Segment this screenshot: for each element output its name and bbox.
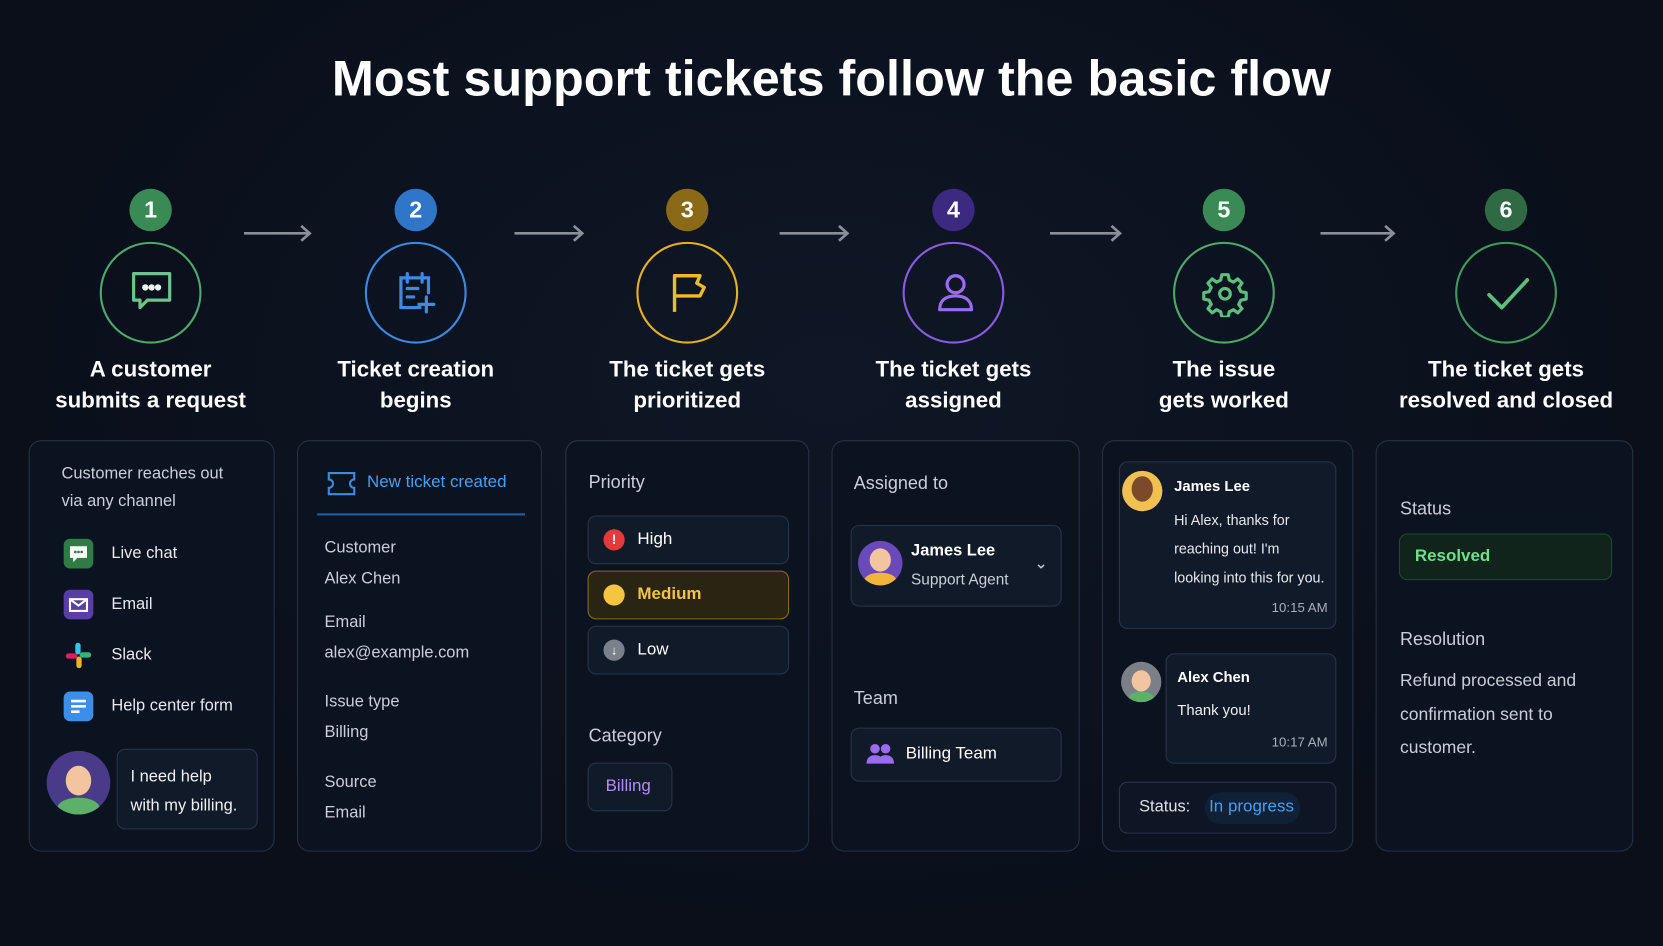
heading 6: resolved and closed bbox=[1399, 388, 1613, 413]
panel: ticket details: alex@example.com bbox=[325, 644, 469, 662]
heading 4: The ticket gets bbox=[875, 357, 1031, 382]
fields bbox=[324, 539, 400, 588]
panel: assignment bbox=[832, 440, 1080, 852]
badge 4 bbox=[932, 189, 975, 231]
icon: chat bbox=[100, 242, 202, 344]
badge 4: 4 bbox=[947, 196, 960, 223]
agent card bbox=[851, 525, 1062, 607]
message james: James Lee bbox=[1174, 477, 1250, 494]
option low: ↓ bbox=[611, 643, 617, 658]
panel: channels bbox=[29, 440, 275, 852]
billing tag: Billing bbox=[606, 777, 651, 795]
agent card: Support Agent bbox=[911, 572, 1009, 589]
status in progress: In progress bbox=[1209, 798, 1294, 816]
step 6 header bbox=[1399, 188, 1613, 413]
heading 1: submits a request bbox=[55, 388, 246, 413]
badge 3 bbox=[666, 189, 708, 231]
customer message bbox=[46, 748, 258, 830]
arrow 1 bbox=[244, 225, 312, 242]
heading 6: The ticket gets bbox=[1428, 357, 1584, 382]
message alex: Alex Chen bbox=[1177, 668, 1250, 685]
option high: High bbox=[637, 530, 672, 548]
agent card: James Lee bbox=[911, 542, 995, 560]
channel: live chat bbox=[64, 538, 178, 568]
heading 2: begins bbox=[380, 388, 452, 413]
resolution text: Refund processed and bbox=[1400, 671, 1576, 690]
status in progress bbox=[1119, 782, 1336, 834]
step 3 header bbox=[609, 188, 765, 413]
arrow 2 bbox=[514, 225, 584, 242]
billing tag bbox=[588, 763, 672, 811]
priority label: Priority bbox=[589, 472, 645, 492]
panel: ticket details bbox=[297, 440, 542, 852]
step 2 header bbox=[337, 188, 494, 413]
panel: ticket details: Email bbox=[325, 804, 366, 822]
arrow 5 bbox=[1320, 225, 1396, 242]
panel: ticket details: Billing bbox=[325, 723, 368, 741]
heading 5 bbox=[1159, 357, 1289, 413]
heading 5: gets worked bbox=[1159, 388, 1289, 413]
panel: ticket details: Issue type bbox=[325, 693, 399, 711]
heading 3: The ticket gets bbox=[609, 357, 765, 382]
resolution text: customer. bbox=[1400, 738, 1476, 757]
message james: Hi Alex, thanks for bbox=[1174, 512, 1289, 528]
message james: reaching out! I'm bbox=[1174, 541, 1279, 557]
arrow 4 bbox=[1050, 225, 1122, 242]
status in progress: Status: bbox=[1139, 798, 1190, 816]
badge 2 bbox=[395, 189, 437, 231]
heading 1 bbox=[55, 357, 246, 413]
heading 2 bbox=[337, 357, 494, 413]
channel: help form bbox=[64, 692, 233, 722]
message james: looking into this for you. bbox=[1174, 570, 1325, 585]
channel: slack: Slack bbox=[111, 646, 152, 664]
option low: Low bbox=[637, 641, 669, 659]
panel: conversation bbox=[1102, 440, 1353, 852]
badge 3: 3 bbox=[681, 196, 694, 223]
heading 2: Ticket creation bbox=[337, 357, 494, 382]
heading 4: assigned bbox=[905, 388, 1002, 413]
icon: check bbox=[1455, 242, 1557, 344]
team card bbox=[851, 728, 1062, 782]
option low bbox=[588, 626, 789, 675]
option high: ! bbox=[612, 531, 616, 547]
heading 3 bbox=[609, 357, 765, 413]
step 1 header bbox=[55, 188, 246, 413]
fields: Alex Chen bbox=[325, 570, 400, 588]
badge 5: 5 bbox=[1217, 196, 1230, 223]
option medium bbox=[588, 571, 789, 619]
resolution label: Resolution bbox=[1400, 629, 1485, 649]
status label: Status bbox=[1400, 498, 1451, 519]
icon: flag bbox=[636, 242, 738, 344]
panel: priority bbox=[565, 440, 809, 852]
option high bbox=[588, 515, 789, 564]
option medium: Medium bbox=[637, 585, 702, 603]
customer message: with my billing. bbox=[130, 797, 237, 815]
message alex: Thank you! bbox=[1177, 701, 1251, 718]
message james: 10:15 AM bbox=[1272, 600, 1328, 615]
fields: Customer bbox=[325, 539, 396, 557]
panel: resolution bbox=[1376, 440, 1633, 852]
intro text: via any channel bbox=[62, 492, 176, 510]
customer message: I need help bbox=[130, 768, 212, 786]
resolved badge bbox=[1399, 533, 1612, 580]
agent card: ⌄ bbox=[1034, 555, 1048, 573]
resolution text bbox=[1400, 671, 1576, 757]
heading 5: The issue bbox=[1173, 357, 1275, 382]
badge 1: 1 bbox=[144, 196, 157, 223]
panel: ticket details: Source bbox=[325, 773, 377, 791]
channel: help form: Help center form bbox=[111, 697, 233, 715]
assigned label: Assigned to bbox=[854, 473, 948, 493]
message alex bbox=[1121, 653, 1336, 764]
badge 5 bbox=[1203, 189, 1245, 231]
heading 1: A customer bbox=[90, 357, 211, 382]
panel: ticket details: Email bbox=[325, 613, 366, 631]
intro text: Customer reaches out bbox=[62, 465, 223, 483]
new ticket header: New ticket created bbox=[367, 473, 507, 491]
message james bbox=[1119, 461, 1336, 629]
title: Most support tickets follow the basic flow bbox=[332, 51, 1331, 107]
icon: clipboard bbox=[365, 242, 467, 344]
icon: gear bbox=[1173, 242, 1275, 344]
intro text bbox=[62, 465, 224, 510]
new ticket header bbox=[317, 467, 525, 515]
channel: email: Email bbox=[111, 595, 152, 613]
team card: Billing Team bbox=[906, 745, 997, 763]
badge 6 bbox=[1485, 189, 1527, 231]
resolved badge: Resolved bbox=[1415, 547, 1490, 565]
heading 4 bbox=[875, 357, 1031, 413]
badge 6: 6 bbox=[1500, 196, 1513, 223]
channel: live chat: Live chat bbox=[111, 544, 177, 562]
heading 3: prioritized bbox=[633, 388, 741, 413]
message alex: 10:17 AM bbox=[1272, 735, 1328, 750]
heading 6 bbox=[1399, 357, 1613, 413]
resolution text: confirmation sent to bbox=[1400, 705, 1553, 724]
step 4 header bbox=[875, 188, 1031, 413]
badge 2: 2 bbox=[409, 196, 422, 223]
step 5 header bbox=[1159, 188, 1289, 413]
badge 1 bbox=[129, 189, 172, 231]
team label: Team bbox=[854, 688, 898, 708]
icon: person bbox=[903, 242, 1004, 344]
category label: Category bbox=[589, 725, 662, 746]
channel: email bbox=[64, 590, 152, 620]
arrow 3 bbox=[780, 225, 850, 242]
channel: slack bbox=[66, 642, 152, 668]
